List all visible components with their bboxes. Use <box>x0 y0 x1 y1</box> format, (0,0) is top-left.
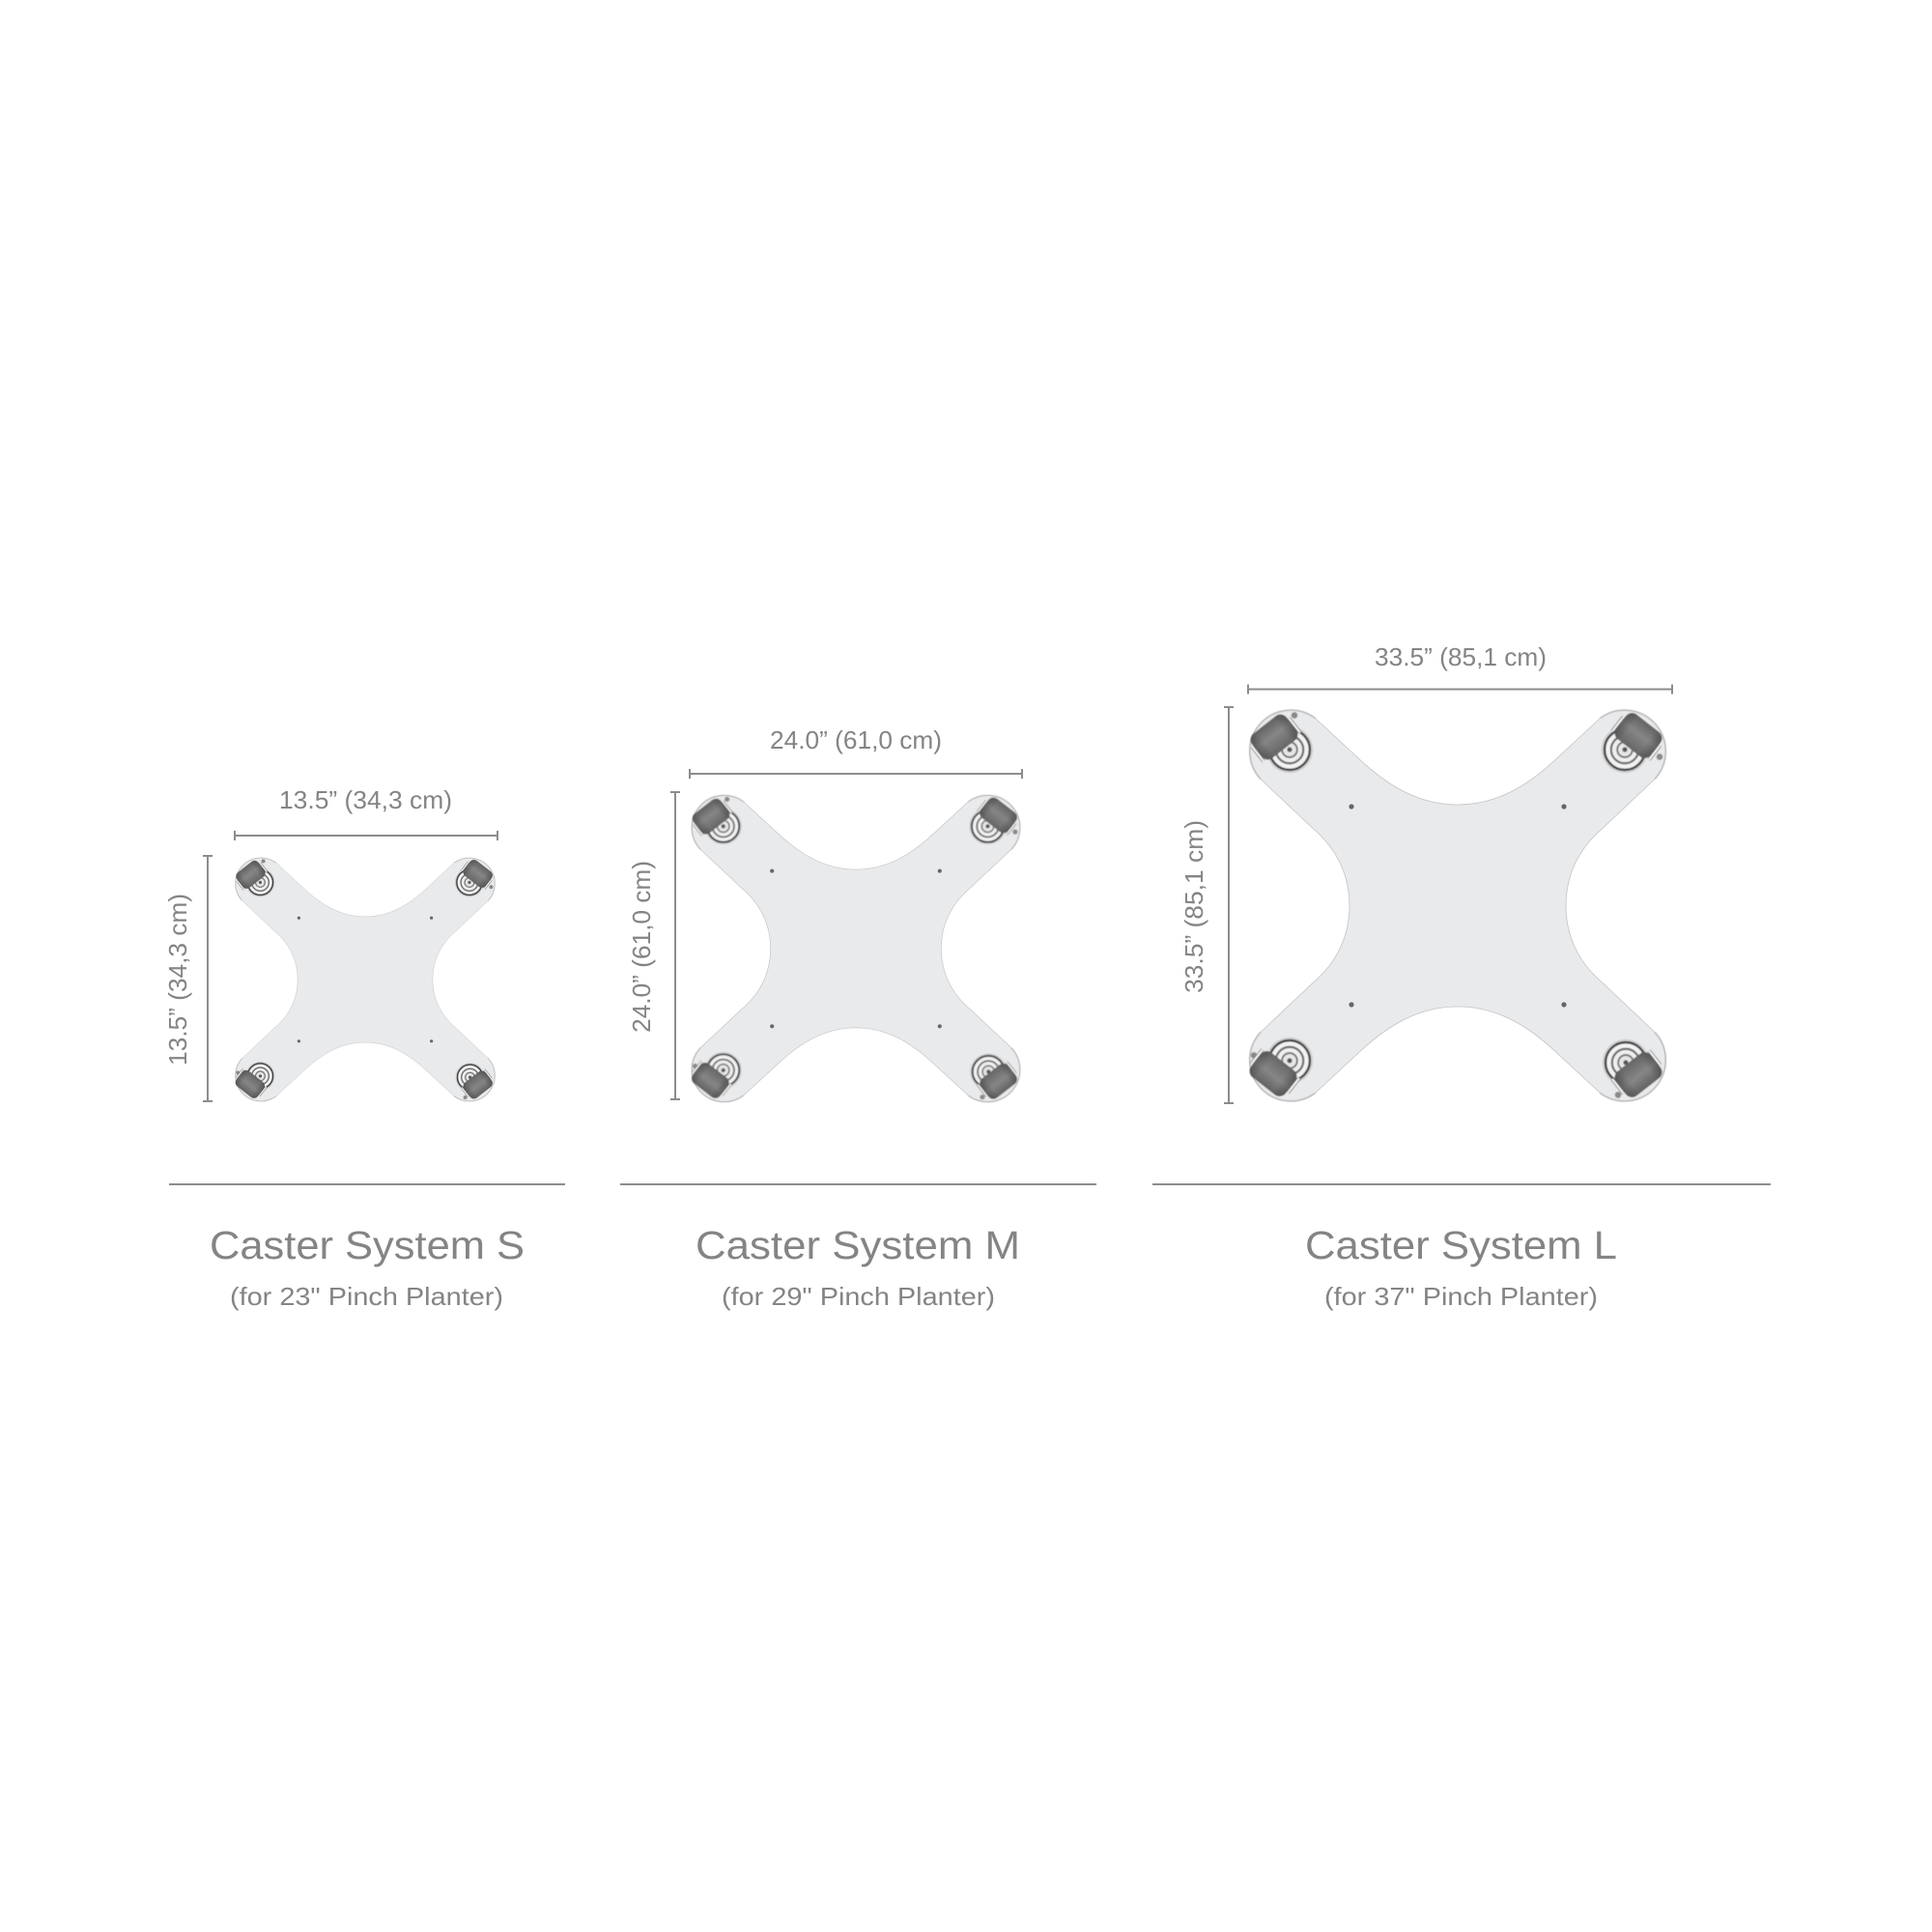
subtitle L: (for 37" Pinch Planter) <box>1324 1282 1598 1311</box>
plate with casters L <box>1245 709 1666 1101</box>
title L: Caster System L <box>1305 1223 1617 1267</box>
divider M <box>620 1183 1096 1185</box>
width dimension line M <box>690 769 1022 779</box>
title M: Caster System M <box>696 1223 1020 1267</box>
subtitle S: (for 23" Pinch Planter) <box>230 1282 503 1311</box>
height label S: 13.5” (34,3 cm) <box>163 894 192 1065</box>
title S: Caster System S <box>210 1223 525 1267</box>
width label S: 13.5” (34,3 cm) <box>279 785 452 814</box>
width label M: 24.0” (61,0 cm) <box>770 725 942 754</box>
height label M: 24.0” (61,0 cm) <box>627 861 656 1033</box>
subtitle M: (for 29" Pinch Planter) <box>722 1282 995 1311</box>
width label L: 33.5” (85,1 cm) <box>1375 642 1547 671</box>
height label L: 33.5” (85,1 cm) <box>1179 820 1208 993</box>
divider S <box>169 1183 565 1185</box>
plate with casters S <box>233 857 496 1101</box>
panel: caster system S <box>163 785 565 1311</box>
divider L <box>1152 1183 1771 1185</box>
panel: caster system M <box>620 725 1096 1311</box>
plate with casters M <box>689 794 1020 1102</box>
width dimension line L <box>1248 684 1672 694</box>
height dimension line M <box>670 792 680 1099</box>
height dimension line L <box>1224 707 1234 1103</box>
width dimension line S <box>235 831 497 840</box>
panel: caster system L <box>1152 642 1771 1311</box>
height dimension line S <box>203 856 213 1101</box>
